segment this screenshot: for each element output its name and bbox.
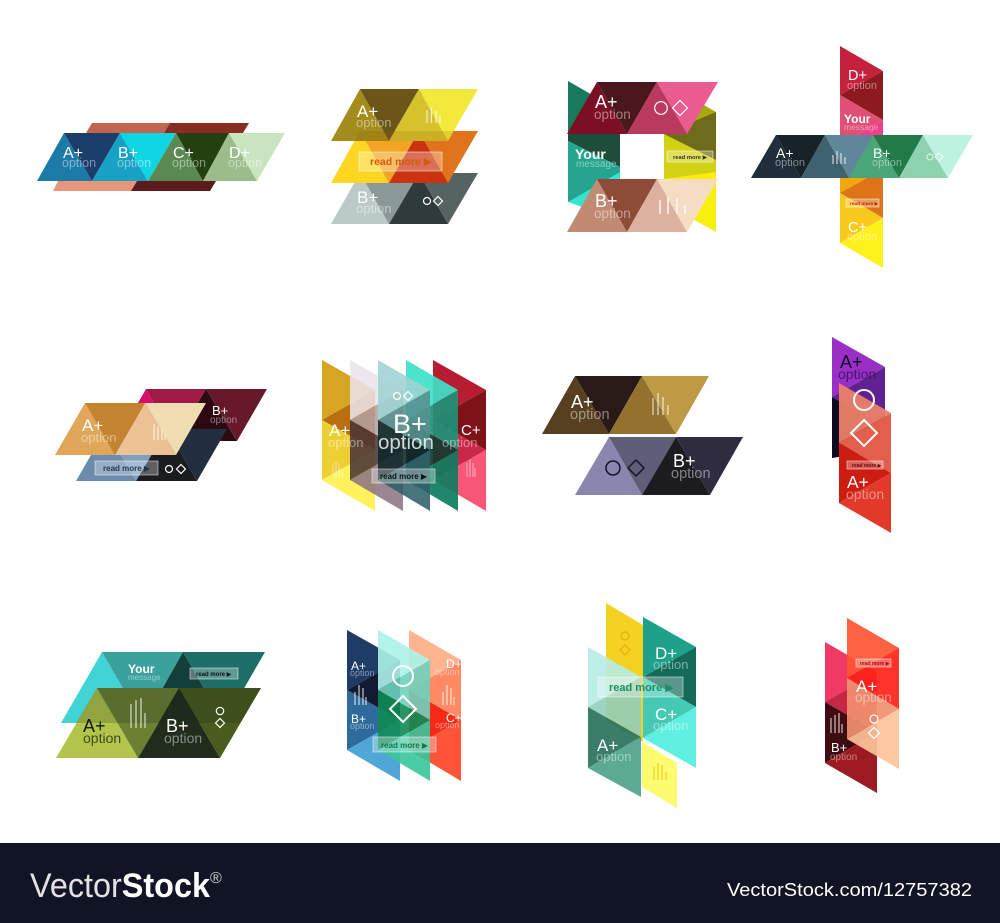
button: read more — [856, 659, 891, 667]
label: A+ option: A+ — [847, 472, 869, 492]
label: Your message: message — [576, 159, 617, 170]
label: D+ option — [435, 657, 462, 677]
label: A+ option — [62, 145, 96, 170]
label: D+ option: D+ — [655, 644, 677, 663]
label: B+ option — [117, 145, 151, 170]
chart: bars — [660, 197, 685, 214]
label: B+ option: B+ — [873, 145, 891, 161]
footer: watermark bar — [0, 843, 1000, 923]
label: A+ option: A+ — [776, 145, 794, 161]
label: A+ option — [846, 472, 884, 502]
label: A+ option — [775, 145, 805, 169]
label: C+ option: option — [847, 231, 877, 243]
label: B+ option — [164, 716, 202, 746]
label: D+ option — [228, 145, 262, 170]
panel: square frame layout — [567, 81, 718, 232]
label: A+ option: A+ — [63, 145, 83, 162]
label: Your message: message — [128, 673, 161, 682]
label: A+ option: option — [328, 435, 363, 450]
icon: diamond — [390, 696, 416, 722]
label: B+ option: option — [378, 431, 434, 454]
button: read more: read more ▶ — [609, 682, 674, 694]
chart: bars — [427, 107, 440, 123]
label: A+ option — [350, 659, 375, 678]
icon: circle — [854, 390, 874, 410]
label: B+ option: B+ — [831, 740, 847, 755]
label: C+ option — [442, 422, 481, 450]
label: B+ option: option — [671, 466, 711, 482]
button: read more — [667, 151, 713, 162]
chart: bars — [131, 698, 145, 728]
panel: teal and olive bands — [56, 652, 265, 758]
image id text: VectorStock.com/12757382 — [727, 880, 972, 900]
label: A+ option: option — [356, 115, 391, 130]
label: Your message — [575, 146, 617, 170]
label: B+ option: B+ — [212, 403, 228, 418]
panel: overlapping A+ B+ bands — [55, 389, 267, 481]
button: read more — [373, 737, 436, 752]
button: read more: read more ▶ — [380, 472, 428, 481]
label: B+ option: B+ — [118, 145, 138, 162]
label: D+ option — [847, 68, 877, 92]
label: B+ option — [350, 712, 375, 731]
label: A+ option: option — [570, 407, 610, 423]
label: B+ option — [378, 409, 434, 454]
button: read more — [372, 469, 435, 483]
label: A+ option: option — [838, 366, 876, 382]
label: B+ option: B+ — [673, 451, 696, 471]
button: read more: read more ▶ — [852, 463, 882, 469]
button: read more: read more ▶ — [860, 661, 890, 667]
icon: circle and diamond — [868, 715, 880, 738]
label: B+ option — [210, 403, 237, 426]
panel: red and peach layered bands — [825, 618, 899, 793]
label: C+ option: option — [435, 720, 460, 730]
label: C+ option — [435, 711, 462, 730]
panel: three stacked bands — [331, 89, 478, 224]
label: B+ option: B+ — [595, 191, 618, 211]
panel: two offset bands — [542, 376, 743, 495]
label: B+ option: option — [350, 721, 375, 731]
label: B+ option: option — [594, 206, 631, 221]
panel: three vertical blue green red bands — [347, 630, 462, 781]
label: C+ option: C+ — [461, 422, 481, 439]
label: A+ option: option — [83, 730, 121, 746]
chart: bars — [831, 713, 842, 733]
panel: five vertical layered bands — [322, 360, 486, 511]
panel: cross layout — [751, 46, 973, 268]
chart: left bars — [355, 685, 366, 705]
button: read more: read more ▶ — [673, 155, 708, 161]
chart: bars — [653, 393, 668, 415]
chart: right bars — [443, 685, 454, 705]
icon: circle and diamond — [655, 100, 688, 116]
button: read more — [598, 677, 683, 697]
label: A+ option — [81, 416, 116, 445]
label: A+ option: option — [596, 749, 631, 764]
label: C+ option: option — [653, 718, 688, 733]
label: A+ option: A+ — [351, 659, 366, 673]
panel: purple and red vertical bands — [832, 337, 891, 533]
button: read more — [190, 668, 238, 679]
label: B+ option: option — [830, 752, 857, 763]
icon: circle and diamond — [166, 464, 186, 474]
label: C+ option: option — [442, 435, 477, 450]
label: C+ option: option — [172, 156, 206, 170]
label: A+ option — [838, 352, 876, 382]
chart: pink bars — [467, 460, 475, 477]
label: D+ option: option — [653, 657, 688, 672]
label: C+ option: C+ — [446, 711, 462, 725]
label: B+ option: option — [356, 201, 391, 216]
label: C+ option: C+ — [848, 220, 867, 236]
label: A+ option: A+ — [83, 716, 106, 736]
label: A+ option — [596, 736, 631, 764]
label: A+ option: A+ — [595, 92, 618, 112]
label: A+ option: option — [855, 690, 892, 705]
button: read more — [95, 461, 158, 475]
label: A+ option — [855, 677, 892, 705]
label: A+ option — [83, 716, 121, 746]
chart: yellow bars — [654, 763, 666, 780]
label: A+ option: A+ — [82, 416, 103, 435]
icon: circle and diamond — [394, 392, 412, 400]
button: read more: read more ▶ — [850, 201, 879, 207]
button: read more: read more ▶ — [103, 464, 151, 473]
label: C+ option — [847, 220, 877, 243]
label: D+ option — [653, 644, 688, 672]
label: B+ option — [830, 740, 857, 763]
label: B+ option: option — [210, 415, 237, 426]
icon: diamond — [851, 420, 877, 446]
label: A+ option: option — [62, 156, 96, 170]
label: A+ option: option — [594, 107, 631, 122]
panel: teal and yellow layered bands — [588, 603, 696, 808]
label: A+ option: option — [81, 430, 116, 445]
label: Your message — [844, 112, 879, 132]
label: D+ option: D+ — [229, 145, 250, 162]
label: Your message: message — [844, 122, 879, 132]
label: B+ option: option — [872, 157, 902, 169]
label: A+ option: option — [350, 668, 375, 678]
label: D+ option: option — [847, 80, 877, 92]
button: read more: read more ▶ — [196, 672, 232, 678]
label: A+ option — [356, 102, 391, 130]
label: B+ option — [594, 191, 631, 221]
label: C+ option: C+ — [173, 145, 194, 162]
label: A+ option: option — [846, 486, 884, 502]
icon: circle and diamond — [620, 632, 630, 655]
button: read more — [359, 152, 442, 171]
button: read more: read more ▶ — [381, 741, 429, 750]
panel: four-option horizontal banner — [37, 123, 285, 191]
label: B+ option — [356, 188, 391, 216]
icon: circle and diamond — [927, 153, 943, 161]
logo: registered mark: ® — [210, 870, 222, 887]
label: D+ option: D+ — [848, 68, 867, 84]
label: Your message: Your — [128, 662, 155, 676]
label: C+ option — [172, 145, 206, 170]
label: D+ option: option — [228, 156, 262, 170]
label: A+ option — [328, 421, 363, 450]
label: Your message: Your — [575, 146, 606, 162]
chart: bars — [154, 424, 165, 440]
label: A+ option: A+ — [357, 102, 378, 121]
icon: circle and diamond — [606, 460, 644, 476]
label: A+ option: A+ — [597, 736, 618, 755]
label: A+ option: A+ — [329, 421, 350, 440]
label: B+ option: option — [164, 730, 202, 746]
icon: circle — [393, 666, 413, 686]
label: B+ option — [671, 451, 711, 482]
label: A+ option: A+ — [571, 392, 594, 412]
button: read more — [847, 461, 883, 469]
label: A+ option: A+ — [856, 677, 877, 696]
button: read more — [846, 199, 879, 207]
label: A+ option: A+ — [840, 352, 863, 372]
label: B+ option: B+ — [357, 188, 378, 207]
label: D+ option: D+ — [446, 657, 462, 671]
label: D+ option: option — [435, 667, 460, 677]
button: read more: read more ▶ — [370, 156, 433, 168]
icon: circle and diamond — [424, 196, 442, 206]
label: B+ option: option — [117, 156, 151, 170]
label: B+ option: B+ — [351, 712, 366, 726]
label: B+ option — [872, 145, 902, 169]
label: B+ option: B+ — [393, 409, 427, 439]
label: A+ option — [570, 392, 610, 423]
icon: circle and diamond — [216, 707, 224, 728]
logo: VectorStock: VectorStock — [30, 867, 210, 905]
label: A+ option — [594, 92, 631, 122]
chart: bars — [833, 151, 845, 164]
label: C+ option — [653, 705, 688, 733]
chart: yellow bars — [333, 462, 342, 477]
label: Your message: Your — [844, 112, 871, 126]
label: Your message — [128, 662, 161, 682]
label: A+ option: option — [775, 157, 805, 169]
label: C+ option: C+ — [655, 705, 677, 724]
label: B+ option: B+ — [166, 716, 189, 736]
